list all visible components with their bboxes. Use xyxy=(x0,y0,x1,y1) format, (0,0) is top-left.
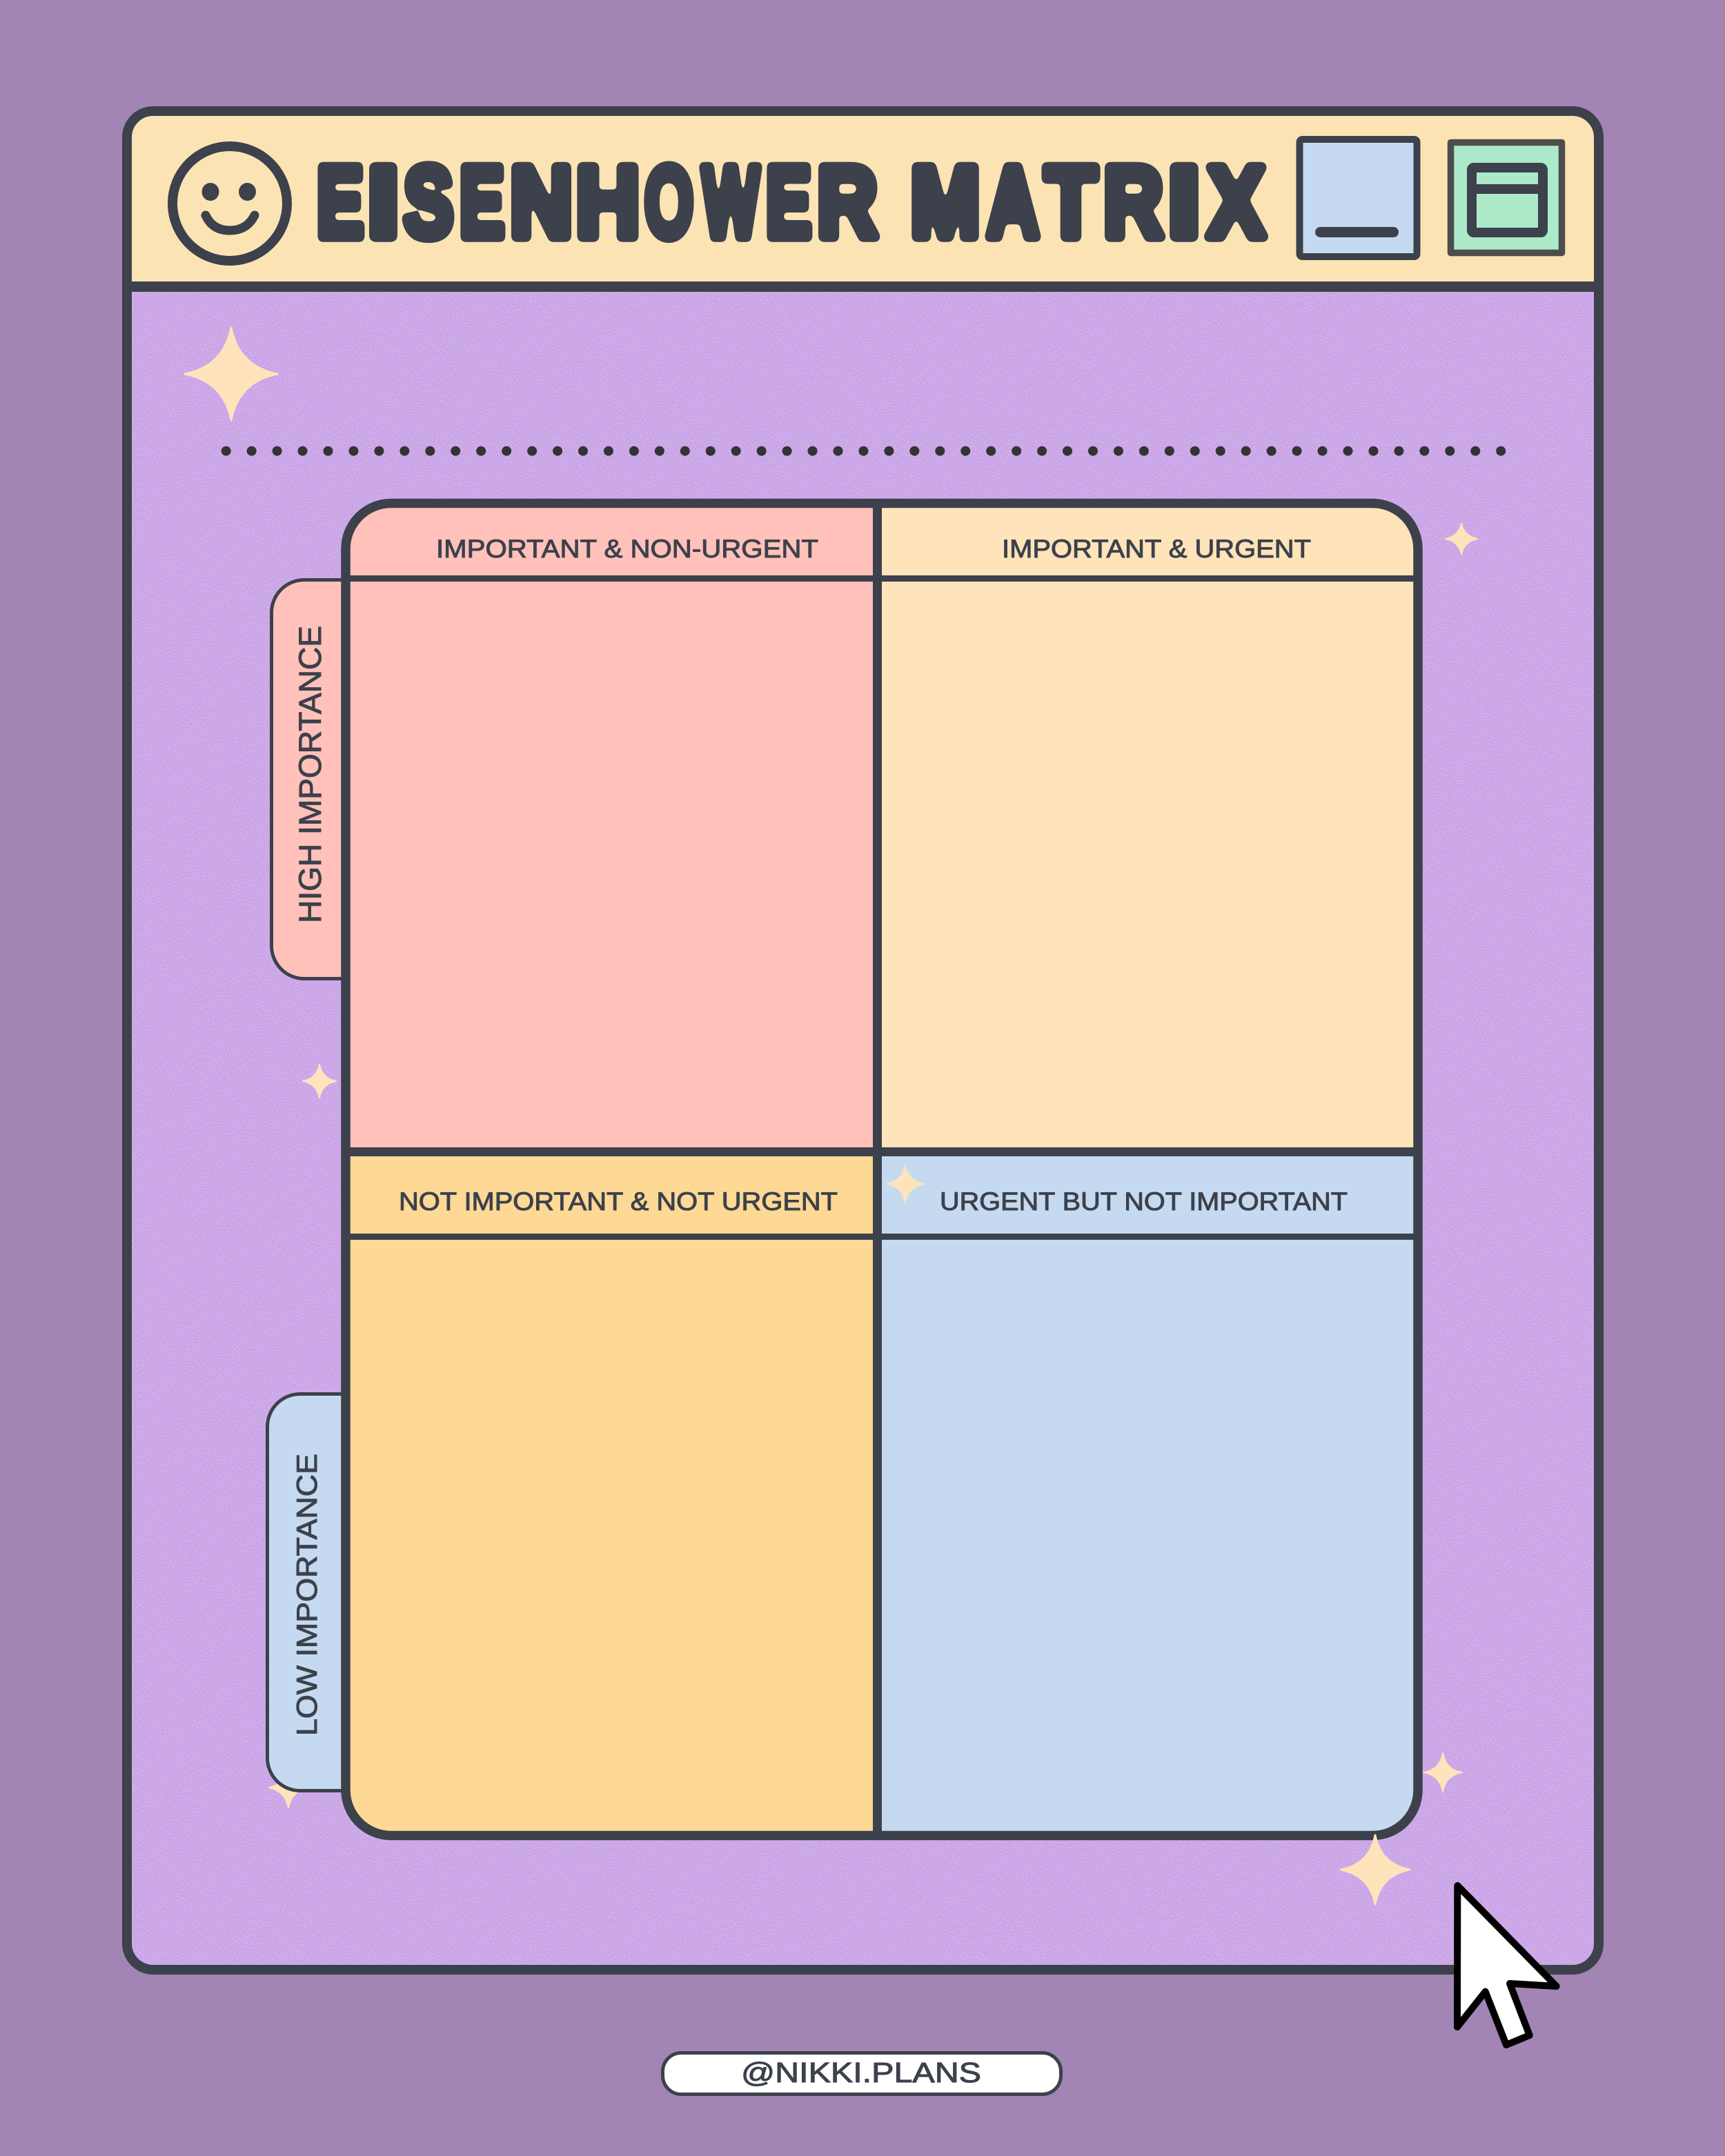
matrix frame xyxy=(346,504,1418,1835)
header bar xyxy=(127,111,1599,286)
panel: matrix xyxy=(346,503,1418,1836)
title: M xyxy=(911,146,980,259)
tab: high importance: HIGH IMPORTANCE xyxy=(293,626,328,923)
title: R xyxy=(1103,146,1163,259)
title: R xyxy=(817,146,878,259)
tab: low importance: LOW IMPORTANCE xyxy=(290,1454,323,1736)
title: T xyxy=(1045,146,1096,258)
title: O xyxy=(644,146,693,258)
icon: large sparkle top left xyxy=(185,328,277,420)
icon: sparkle inside matrix xyxy=(886,1165,925,1203)
tab: high importance xyxy=(272,580,345,978)
icon: smiley face xyxy=(172,146,287,261)
window body xyxy=(132,292,1594,1965)
title: H xyxy=(576,146,640,259)
window frame xyxy=(127,111,1599,1970)
icon: small sparkle bottom right xyxy=(1423,1753,1462,1792)
dotted divider xyxy=(226,446,1501,456)
title: S xyxy=(404,146,453,259)
tab: low importance xyxy=(268,1394,345,1791)
title: E xyxy=(766,146,811,259)
title: E xyxy=(317,146,364,258)
icon: minimize button xyxy=(1300,139,1417,257)
heading: not important and not urgent: NOT IMPORTANT & NOT URGENT xyxy=(399,1187,838,1216)
credit pill xyxy=(662,2053,1061,2095)
heading: important and urgent: IMPORTANT & URGENT xyxy=(1002,534,1311,563)
matrix grid lines xyxy=(346,504,1417,1835)
icon: large sparkle bottom right xyxy=(1341,1835,1410,1904)
title: N xyxy=(510,146,573,258)
credit pill: @NIKKI.PLANS xyxy=(741,2057,981,2088)
title: W xyxy=(702,146,760,259)
heading: important and non-urgent: IMPORTANT & NON-URGENT xyxy=(436,534,818,563)
title: I xyxy=(1168,146,1200,259)
title: A xyxy=(987,146,1039,258)
icon: sparkle right of matrix xyxy=(1446,524,1477,554)
title xyxy=(317,145,1265,259)
heading: urgent but not important: URGENT BUT NOT IMPORTANT xyxy=(940,1187,1348,1216)
title: X xyxy=(1208,145,1265,258)
icon: sparkle left of matrix xyxy=(303,1065,336,1098)
icon: maximize button xyxy=(1450,142,1562,253)
header divider xyxy=(127,281,1599,292)
matrix cells xyxy=(346,503,1418,1836)
title: E xyxy=(460,147,504,259)
title: I xyxy=(368,146,399,258)
icon: mouse cursor xyxy=(1457,1886,1557,2045)
icon: sparkle behind low importance tab xyxy=(269,1768,308,1808)
panel: window xyxy=(127,111,1599,1970)
